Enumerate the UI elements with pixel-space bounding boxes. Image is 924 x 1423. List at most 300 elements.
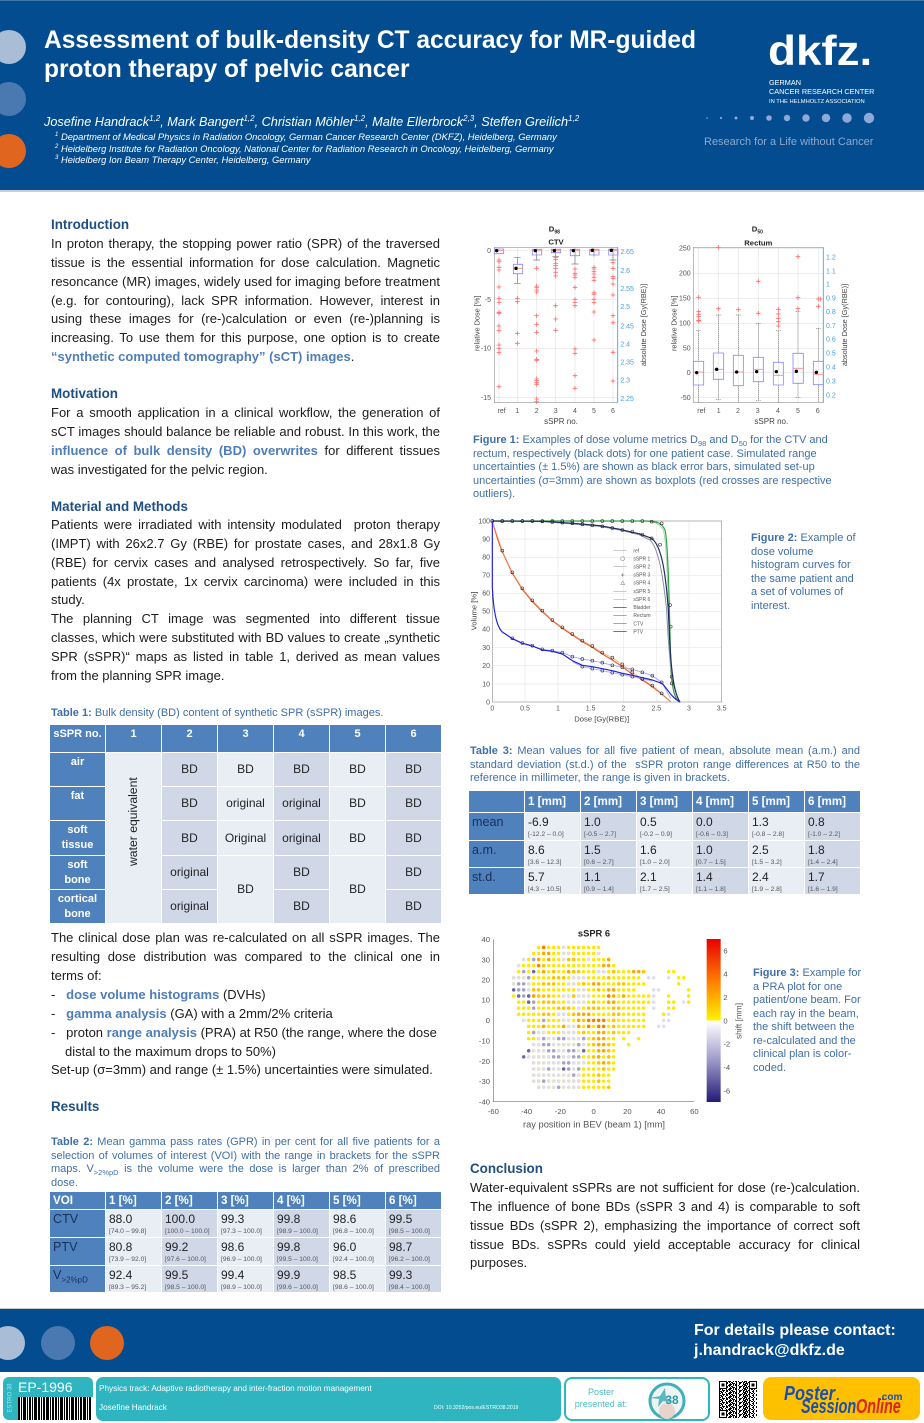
DVH axes labels: 50 bbox=[482, 609, 490, 616]
heading: conclusion: Conclusion bbox=[470, 1161, 543, 1176]
caption: figure 2: Figure 2: Example of bbox=[751, 532, 856, 544]
chart: D98 CTV: -10 bbox=[481, 346, 491, 353]
table 1: bulk density content: BD bbox=[181, 796, 198, 810]
chart: D98 CTV: 98 bbox=[554, 230, 560, 236]
DVH axes labels: 0 bbox=[490, 706, 494, 713]
table 1: bulk density content: BD bbox=[405, 830, 422, 844]
chart: D50 Rectum: 5 bbox=[796, 408, 800, 415]
table 1: bulk density content: BD bbox=[349, 830, 366, 844]
table 2: gamma pass rates: VOI bbox=[53, 1194, 73, 1206]
table 2: gamma pass rates: [73.9 – 92.0] bbox=[109, 1256, 146, 1263]
table 1: bulk density content: 2 bbox=[186, 728, 193, 740]
table 1: bulk density content: BD bbox=[293, 899, 310, 913]
chart: D50 Rectum: sSPR no. bbox=[754, 417, 788, 426]
table 2: gamma pass rates: 5 [%] bbox=[333, 1194, 361, 1206]
text: material and methods: Patients were irradiated with intensity modulated proton therapy (IMPT) with 26x2.7 Gy (RBE) for prostate cases, and 28x1.8 Gy (RBE) for cervix cases and analysed retrospectively. So far, five patients (4x prostate, 1x cervix carcinoma) were included in this study. bbox=[51, 517, 440, 607]
DVH axes labels: 20 bbox=[482, 663, 490, 670]
table 3: range differences: [-12.2 – 0.0] bbox=[528, 831, 564, 838]
chart: D98 CTV: relative Dose [%] bbox=[472, 296, 481, 351]
PRA axes labels: 60 bbox=[690, 1107, 699, 1116]
PRA axes labels: 0 bbox=[486, 1016, 490, 1025]
poster title: Assessment of bulk-density CT accuracy for MR-guided bbox=[44, 27, 696, 54]
table 2: gamma pass rates: 92.4 bbox=[109, 1268, 132, 1282]
logo word: Online: Online bbox=[856, 1396, 901, 1418]
DVH axes labels: 2 bbox=[621, 706, 625, 713]
chart: D98 CTV: 2.45 bbox=[620, 323, 634, 330]
chart: D50 Rectum: 200 bbox=[679, 271, 691, 278]
figure 2: dose volume histogram bbox=[470, 518, 727, 724]
curves: Bladder bbox=[492, 521, 680, 702]
icon: ESTRO 38 badge bbox=[648, 1382, 686, 1420]
PRA dots bbox=[514, 947, 689, 1087]
table 1: bulk density content: cortical bbox=[58, 893, 97, 905]
table 3: range differences: 6 [mm] bbox=[808, 794, 846, 808]
table 1: bulk density content: BD bbox=[181, 830, 198, 844]
chart: D50 Rectum: 150 bbox=[679, 296, 691, 303]
chart: D98 CTV: -5 bbox=[485, 297, 491, 304]
table 2: gamma pass rates: [92.4 – 100.0] bbox=[333, 1256, 374, 1263]
PosterSessionOnline logo bbox=[763, 1377, 920, 1420]
text: clinical dose plan: The clinical dose plan was re-calculated on all sSPR images. The resulting dose distribution was compared to the clinical one in terms of: bbox=[51, 930, 440, 983]
table 1: bulk density content: fat bbox=[71, 790, 84, 802]
table 2: gamma pass rates: [89.3 – 95.2] bbox=[109, 1284, 146, 1291]
chart: D98 CTV: 5 bbox=[592, 408, 596, 415]
table 3: range differences: [0.7 – 1.5] bbox=[696, 859, 726, 866]
table 2: gamma pass rates: [96.2 – 100.0] bbox=[389, 1256, 430, 1263]
chart: D98 CTV: sSPR no. bbox=[544, 417, 578, 426]
chart: D98 CTV: absolute Dose [Gy(RBE)] bbox=[639, 284, 648, 366]
table 1: bulk density content: 1 bbox=[130, 728, 137, 740]
heading: introduction: Introduction bbox=[51, 217, 129, 232]
text: motivation: For a smooth application in a clinical workflow, the generation of sCT images should balance be reliable and robust. In this work, the influence of bulk density (BD) overwrites for different tissues was investigated for the pelvic region. bbox=[51, 405, 440, 477]
table 3: range differences: 2.1 bbox=[640, 870, 657, 884]
table 3: range differences: [1.7 – 2.5] bbox=[640, 886, 670, 893]
table 3: range differences: [4.3 – 10.5] bbox=[528, 886, 561, 893]
table 2: gamma pass rates: 98.5 bbox=[333, 1268, 356, 1282]
table 2: gamma pass rates: [98.6 – 100.0] bbox=[333, 1284, 374, 1291]
chart: D50 Rectum: 50 bbox=[757, 230, 763, 236]
table 2: gamma pass rates: [96.9 – 100.0] bbox=[221, 1256, 262, 1263]
presented at text: presented at: bbox=[575, 1398, 627, 1408]
caption: table 1: Table 1: Bulk density (BD) content of synthetic SPR (sSPR) images. bbox=[51, 707, 383, 719]
caption: figure 1 bbox=[473, 434, 832, 500]
table 1: bulk density content: sSPR no. bbox=[53, 728, 102, 740]
caption: figure 3: re-calculated and the bbox=[753, 1034, 856, 1046]
table 2: gamma pass rates: [96.8 – 100.0] bbox=[333, 1228, 374, 1235]
table 1: bulk density content: air bbox=[71, 756, 84, 768]
table 1: bulk density content: BD bbox=[237, 882, 254, 896]
logo word: Session: Session bbox=[801, 1396, 856, 1418]
chart: D50 Rectum: 0.3 bbox=[826, 378, 836, 385]
table 3: range differences: [1.9 – 2.8] bbox=[752, 886, 782, 893]
icon: QR code bbox=[719, 1381, 757, 1418]
table 3: range differences bbox=[469, 791, 860, 894]
chart: D50 Rectum: relative Dose [%] bbox=[670, 296, 679, 351]
chart: D50 Rectum: 4 bbox=[776, 408, 780, 415]
DVH axes labels: 70 bbox=[482, 573, 490, 580]
conference vertical tag: ESTRO 38 bbox=[8, 1383, 14, 1413]
caption: figure 2: interest. bbox=[751, 600, 790, 612]
text: material and methods: The planning CT image was segmented into different tissue classes, which were substituted with BD values to create „synthetic SPR (sSPR)“ maps as listed in table 1, derived as mean values from the planning SPR image. bbox=[51, 611, 440, 683]
caption: figure 2 bbox=[751, 532, 856, 612]
caption: figure 3: a PRA plot for one bbox=[753, 980, 842, 992]
table 2: gamma pass rates: 98.6 bbox=[221, 1240, 244, 1254]
table 2: gamma pass rates: [98.9 – 100.0] bbox=[221, 1284, 262, 1291]
DVH legend: CTV bbox=[633, 621, 644, 627]
table 3: range differences: [1.4 – 2.4] bbox=[808, 859, 838, 866]
table 3: range differences: [-1.0 – 2.2] bbox=[808, 831, 840, 838]
table 3: range differences: [1.5 – 3.2] bbox=[752, 859, 782, 866]
PRA colour bar: 2 bbox=[723, 993, 728, 1002]
table 1: bulk density content: BD bbox=[293, 865, 310, 879]
caption: table 2: maps. V>2%pD is the volume were the dose is larger than 2% of prescribed bbox=[51, 1163, 440, 1177]
table 2: gamma pass rates: [98.5 – 100.0] bbox=[165, 1284, 206, 1291]
PRA colour bar: -6 bbox=[723, 1086, 730, 1095]
PRA axes labels: 30 bbox=[481, 955, 490, 964]
contact details bbox=[694, 1322, 896, 1358]
table 2: gamma pass rates: V>2%pD bbox=[53, 1268, 88, 1285]
table 2: gamma pass rates: [97.6 – 100.0] bbox=[165, 1256, 206, 1263]
list: analysis methods: - dose volume histograms (DVHs) bbox=[51, 987, 266, 1002]
DVH axes labels: 3 bbox=[687, 706, 691, 713]
table 3: range differences: [1.1 – 1.8] bbox=[696, 886, 726, 893]
chart: D50 Rectum: 6 bbox=[816, 408, 820, 415]
DVH legend: Rectum bbox=[633, 613, 651, 619]
table 3: range differences: 1.6 bbox=[640, 843, 657, 857]
chart: D50 Rectum: 0.8 bbox=[826, 309, 836, 316]
table 2: gamma pass rates: 4 [%] bbox=[277, 1194, 305, 1206]
table 1: bulk density content: 6 bbox=[410, 728, 417, 740]
chart: D98 CTV: 2.55 bbox=[620, 286, 634, 293]
table 2: gamma pass rates: 99.8 bbox=[277, 1240, 300, 1254]
caption: figure 3: patient/one beam. For bbox=[753, 994, 861, 1006]
PRA colour bar: 4 bbox=[723, 970, 728, 979]
table 2: gamma pass rates: CTV bbox=[53, 1212, 78, 1226]
chart: D98 CTV: 1 bbox=[515, 408, 519, 415]
PRA colour bar: -4 bbox=[723, 1063, 731, 1072]
chart: D50 Rectum: 1 bbox=[717, 408, 721, 415]
list: analysis methods: - proton range analysis (PRA) at R50 (the range, where the dose distal to the maximum drops to 50%) bbox=[51, 1025, 437, 1059]
table 3: range differences: mean bbox=[472, 815, 504, 829]
DVH axes labels bbox=[470, 518, 727, 724]
chart: D50 Rectum: 0 bbox=[687, 370, 691, 377]
caption: table 3: Table 3: Mean values for all five patient of mean, absolute mean (a.m.) and standard deviation (st.d.) of the sSPR proton range differences at R50 to the reference in millimeter, the range is given in brackets. bbox=[470, 745, 860, 784]
table 2: gamma pass rates: 99.5 bbox=[165, 1268, 188, 1282]
chart: D98 CTV: 4 bbox=[573, 408, 577, 415]
PRA axes labels: 20 bbox=[481, 976, 490, 985]
DOI: DOI: 10.3252/pos.eu/ESTRO38.2019 bbox=[434, 1405, 518, 1411]
PRA colour bar bbox=[707, 939, 744, 1102]
dkfz full name: GERMAN bbox=[769, 78, 801, 87]
table 3: range differences: 2.4 bbox=[752, 870, 769, 884]
table 2: gamma pass rates bbox=[50, 1192, 441, 1292]
chart: D50 Rectum: 0.7 bbox=[826, 323, 836, 330]
chart: D50 Rectum: absolute Dose [Gy(RBE)] bbox=[840, 284, 849, 366]
table 1: bulk density content: original bbox=[282, 796, 321, 810]
heading: material and methods: Material and Methods bbox=[51, 499, 188, 514]
PRA colour bar: 6 bbox=[723, 946, 728, 955]
affiliations: 3 Heidelberg Ion Beam Therapy Center, Heidelberg, Germany bbox=[55, 154, 311, 165]
chart: D98 CTV: ref bbox=[498, 408, 506, 415]
chart: D50 Rectum: ref bbox=[697, 408, 705, 415]
DVH axes labels: 2.5 bbox=[651, 706, 661, 713]
figure 3: proton range analysis plot bbox=[479, 928, 744, 1130]
table 2: gamma pass rates: [97.3 – 100.0] bbox=[221, 1228, 262, 1235]
chart: D98 CTV bbox=[472, 225, 648, 426]
table 3: range differences: 5 [mm] bbox=[752, 794, 790, 808]
header decorative circles bbox=[0, 30, 26, 168]
list: analysis methods: - gamma analysis (GA) with a 2mm/2% criteria bbox=[51, 1006, 333, 1021]
PRA colour bar: 0 bbox=[723, 1016, 728, 1025]
chart: D98 CTV: -15 bbox=[481, 395, 491, 402]
caption: figure 3 bbox=[753, 967, 861, 1074]
table 1: bulk density content: soft bbox=[67, 859, 88, 871]
PRA axes labels: -60 bbox=[488, 1107, 499, 1116]
chart: D50 Rectum: D bbox=[752, 225, 757, 234]
chart: D50 Rectum: -50 bbox=[681, 395, 691, 402]
contact details: For details please contact: bbox=[694, 1322, 896, 1339]
table 1: bulk density content: original bbox=[226, 796, 265, 810]
chart: D50 Rectum: 1 bbox=[826, 282, 830, 289]
table 1: bulk density content: original bbox=[282, 830, 321, 844]
barcode bbox=[18, 1397, 93, 1420]
chart: D98 CTV: 2.35 bbox=[620, 359, 634, 366]
DVH axes labels: Volume [%] bbox=[470, 592, 479, 630]
table 3: range differences: 0.5 bbox=[640, 815, 657, 829]
table 3: range differences: 1.4 bbox=[696, 870, 713, 884]
table 2: gamma pass rates: [99.5 – 100.0] bbox=[277, 1256, 318, 1263]
table 3: range differences: [-0.8 – 2.8] bbox=[752, 831, 784, 838]
table 3: range differences: 1.1 bbox=[584, 870, 601, 884]
PRA axes labels: 40 bbox=[481, 935, 490, 944]
PRA axes labels: 20 bbox=[623, 1107, 632, 1116]
text: material and methods bbox=[51, 517, 440, 683]
dkfz full name: IN THE HELMHOLTZ ASSOCIATION bbox=[769, 99, 865, 105]
logo word: Poster: Poster bbox=[784, 1383, 835, 1405]
curves: PTV bbox=[492, 521, 680, 702]
table 3: range differences: 3 [mm] bbox=[640, 794, 678, 808]
DVH axes labels: 10 bbox=[482, 681, 490, 688]
table 1: bulk density content: 4 bbox=[298, 728, 305, 740]
chart: D50 Rectum: 0.2 bbox=[826, 392, 836, 399]
table 1: bulk density content: BD bbox=[405, 899, 422, 913]
table 3: range differences: 1.0 bbox=[584, 815, 601, 829]
footer decorative circles bbox=[0, 1326, 124, 1360]
DVH axes labels: 0.5 bbox=[520, 706, 530, 713]
PRA axes labels bbox=[479, 935, 699, 1129]
DVH legend: PTV bbox=[633, 629, 644, 635]
DVH legend: Bladder bbox=[633, 605, 651, 611]
table 2: gamma pass rates: [74.0 – 99.8] bbox=[109, 1228, 146, 1235]
DVH axes labels: 100 bbox=[478, 518, 490, 525]
table 1: bulk density content: BD bbox=[349, 762, 366, 776]
table 2: gamma pass rates: PTV bbox=[53, 1240, 78, 1254]
curves: CTV bbox=[492, 521, 680, 702]
table 2: gamma pass rates: 88.0 bbox=[109, 1212, 132, 1226]
table 3: range differences: [3.6 – 12.3] bbox=[528, 859, 561, 866]
table 2: gamma pass rates: 99.2 bbox=[165, 1240, 188, 1254]
table 2: gamma pass rates: 2 [%] bbox=[165, 1194, 193, 1206]
table 3: range differences: 1 [mm] bbox=[528, 794, 566, 808]
table 1: bulk density content: tissue bbox=[62, 839, 93, 851]
table 2: gamma pass rates: [98.9 – 100.0] bbox=[277, 1228, 318, 1235]
caption: figure 1: Figure 1: Examples of dose volume metrics D98 and D50 for the CTV and bbox=[473, 434, 828, 448]
table 1: bulk density content: BD bbox=[349, 796, 366, 810]
table 3: range differences: [-0.5 – 2.7] bbox=[584, 831, 616, 838]
chart: D98 CTV: 2 bbox=[535, 408, 539, 415]
PRA colour bar: -2 bbox=[723, 1040, 730, 1049]
PRA axes labels: 40 bbox=[657, 1107, 665, 1116]
table 2: gamma pass rates: 1 [%] bbox=[109, 1194, 137, 1206]
caption: figure 1: outliers). bbox=[473, 488, 515, 500]
table 3: range differences: [0.9 – 1.4] bbox=[584, 886, 614, 893]
chart: D50 Rectum: 250 bbox=[679, 246, 691, 253]
chart: D50 Rectum: 2 bbox=[736, 408, 740, 415]
PRA axes labels: 0 bbox=[592, 1107, 596, 1116]
authors: Josefine Handrack1,2, Mark Bangert1,2, Christian Möhler1,2, Malte Ellerbrock2,3, Steffen Greilich1,2 bbox=[44, 114, 579, 129]
table 2: gamma pass rates: 99.3 bbox=[389, 1268, 412, 1282]
PRA colour bar: shift [mm] bbox=[734, 1003, 744, 1039]
caption: figure 1: uncertainties (± 1.5%) are shown as black error bars, simulated set-up bbox=[473, 461, 815, 473]
heading: results: Results bbox=[51, 1099, 99, 1114]
table 3: range differences: 1.3 bbox=[752, 815, 769, 829]
DVH legend: sSPR 2 bbox=[633, 564, 651, 570]
chart: D50 Rectum: 50 bbox=[683, 346, 691, 353]
table 1: bulk density content: bone bbox=[64, 908, 91, 920]
table 2: gamma pass rates: 6 [%] bbox=[389, 1194, 417, 1206]
PRA axes labels: -20 bbox=[555, 1107, 566, 1116]
caption: table 2: selection of volumes of interest (VOI) with the range in brackets for the sSPR bbox=[51, 1150, 440, 1162]
table 1: bulk density content: water equivalent bbox=[126, 777, 140, 866]
table 1: bulk density content: BD bbox=[405, 762, 422, 776]
PRA plot title: sSPR 6 bbox=[578, 928, 610, 938]
table 1: bulk density content: BD bbox=[405, 796, 422, 810]
chart: D50 Rectum: 100 bbox=[679, 321, 691, 328]
presenter: Josefine Handrack bbox=[99, 1403, 167, 1412]
DVH axes labels: 0 bbox=[486, 699, 490, 706]
table 1: bulk density content: BD bbox=[405, 865, 422, 879]
contact details: j.handrack@dkfz.de bbox=[694, 1342, 845, 1358]
PRA axes labels: -30 bbox=[479, 1077, 490, 1086]
dkfz logo: dkfz. bbox=[768, 27, 872, 74]
DVH legend: sSPR 5 bbox=[633, 589, 651, 595]
table 1: bulk density content: bone bbox=[64, 874, 91, 886]
chart: D98 CTV: 6 bbox=[611, 408, 615, 415]
table 2: gamma pass rates: 99.5 bbox=[389, 1212, 412, 1226]
curves: Rectum bbox=[492, 521, 671, 702]
presented at box bbox=[564, 1377, 710, 1421]
caption: figure 2: a set of volumes of bbox=[751, 586, 843, 598]
table 3: range differences: [0.6 – 2.7] bbox=[584, 859, 614, 866]
DVH legend bbox=[613, 548, 651, 635]
chart: D98 CTV: 0 bbox=[487, 248, 491, 255]
presented at text bbox=[575, 1387, 627, 1409]
table 1: bulk density content bbox=[50, 725, 441, 923]
poster title: proton therapy of pelvic cancer bbox=[44, 56, 410, 83]
table 3: range differences: st.d. bbox=[472, 870, 496, 884]
chart: D50 Rectum: 1.2 bbox=[826, 255, 836, 262]
DVH legend: sSPR 6 bbox=[633, 597, 651, 603]
chart: D50 Rectum: 3 bbox=[756, 408, 760, 415]
DVH axes labels: 1 bbox=[556, 706, 560, 713]
track title: Physics track: Adaptive radiotherapy and inter-fraction motion management bbox=[99, 1384, 372, 1393]
table 1: bulk density content: BD bbox=[181, 762, 198, 776]
table 1: bulk density content: Original bbox=[225, 830, 266, 844]
table 1: bulk density content: BD bbox=[237, 762, 254, 776]
chart: D50 Rectum: 0.6 bbox=[826, 337, 836, 344]
table 3: range differences: 2.5 bbox=[752, 843, 769, 857]
PRA axes labels: 10 bbox=[481, 996, 490, 1005]
caption: table 2: Table 2: Mean gamma pass rates (GPR) in per cent for all five patients for a bbox=[51, 1136, 440, 1148]
table 3: range differences: 1.8 bbox=[808, 843, 825, 857]
chart: D50 Rectum: Rectum bbox=[744, 238, 773, 247]
table 1: bulk density content: original bbox=[170, 899, 209, 913]
table 2: gamma pass rates: 99.8 bbox=[277, 1212, 300, 1226]
affiliations bbox=[55, 131, 558, 165]
table 2: gamma pass rates: [100.0 – 100.0] bbox=[165, 1228, 210, 1235]
table 3: range differences: [1.0 – 2.0] bbox=[640, 859, 670, 866]
dotted decoration bbox=[706, 112, 874, 124]
chart: D50 Rectum: 0.4 bbox=[826, 364, 836, 371]
table 3: range differences: 0.0 bbox=[696, 815, 713, 829]
PRA axes labels: -40 bbox=[479, 1097, 490, 1106]
table 3: range differences: a.m. bbox=[472, 843, 496, 857]
DVH axes labels: Dose [Gy(RBE)] bbox=[574, 715, 629, 724]
heading: motivation: Motivation bbox=[51, 386, 118, 401]
session track box bbox=[96, 1377, 561, 1421]
table 1: bulk density content: soft bbox=[67, 824, 88, 836]
DVH axes labels: 40 bbox=[482, 627, 490, 634]
table 2: gamma pass rates: 99.4 bbox=[221, 1268, 244, 1282]
list: analysis methods bbox=[51, 987, 437, 1077]
chart: D50 Rectum: 0.9 bbox=[826, 296, 836, 303]
DVH axes labels: 1.5 bbox=[586, 706, 596, 713]
DVH legend: sSPR 3 bbox=[633, 573, 651, 579]
table 3: range differences: [-0.2 – 0.9] bbox=[640, 831, 672, 838]
table 2: gamma pass rates: 100.0 bbox=[165, 1212, 195, 1226]
DVH axes labels: 90 bbox=[482, 536, 490, 543]
DVH legend: ref bbox=[633, 548, 640, 554]
affiliations: 1 Department of Medical Physics in Radiation Oncology, German Cancer Research Center (DKFZ), Heidelberg, Germany bbox=[55, 131, 557, 142]
figure 1: box plots of D98 and D50 bbox=[472, 225, 849, 426]
text: conclusion: Water-equivalent sSPRs are not sufficient for dose (re-)calculation. The influence of bone BDs (sSPR 3 and 4) is comparable to soft tissue BDs (sSPR 2), emphasizing the importance of correct soft tissue BDs. sSPRs could yield acceptable accuracy for clinical purposes. bbox=[470, 1180, 860, 1270]
table 3: range differences: 1.7 bbox=[808, 870, 825, 884]
list: analysis methods: Set-up (σ=3mm) and range (± 1.5%) uncertainties were simulated. bbox=[51, 1062, 433, 1077]
table 2: gamma pass rates: [98.4 – 100.0] bbox=[389, 1284, 430, 1291]
table 3: range differences: 5.7 bbox=[528, 870, 545, 884]
slogan: Research for a Life without Cancer bbox=[704, 136, 873, 148]
DVH legend: sSPR 1 bbox=[633, 556, 651, 562]
poster title bbox=[44, 27, 696, 83]
table 3: range differences: [1.6 – 1.9] bbox=[808, 886, 838, 893]
table 2: gamma pass rates: 80.8 bbox=[109, 1240, 132, 1254]
text: introduction: In proton therapy, the stopping power ratio (SPR) of the traversed tissue is the essential information for dose calculation. Magnetic resoncance (MR) images, widely used for imaging before treatment (e.g. for contouring), lack SPR information. However, interest in using these images for (re-)calculation or even (re-)planning is increasing. To use them for this purpose, one option is to create “synthetic computed tomography” (sCT) images. bbox=[51, 236, 440, 364]
table 3: range differences: 2 [mm] bbox=[584, 794, 622, 808]
chart: D98 CTV: 3 bbox=[554, 408, 558, 415]
icon: ESTRO 38 badge: 38 bbox=[665, 1393, 679, 1407]
caption: figure 2: histogram curves for bbox=[751, 559, 851, 571]
DVH axes labels: 3.5 bbox=[717, 706, 727, 713]
chart: D50 Rectum: 1.1 bbox=[826, 268, 836, 275]
PRA axes labels: ray position in BEV (beam 1) [mm] bbox=[523, 1119, 665, 1129]
caption: figure 1: rectum, respectively (black dots) for one patient case. Simulated range bbox=[473, 448, 817, 460]
table 3: range differences: 1.0 bbox=[696, 843, 713, 857]
PRA axes labels: -40 bbox=[521, 1107, 532, 1116]
table 2: gamma pass rates: 98.6 bbox=[333, 1212, 356, 1226]
table 3: range differences: 0.8 bbox=[808, 815, 825, 829]
chart: D98 CTV: 2.25 bbox=[620, 396, 634, 403]
header band bbox=[0, 0, 924, 192]
